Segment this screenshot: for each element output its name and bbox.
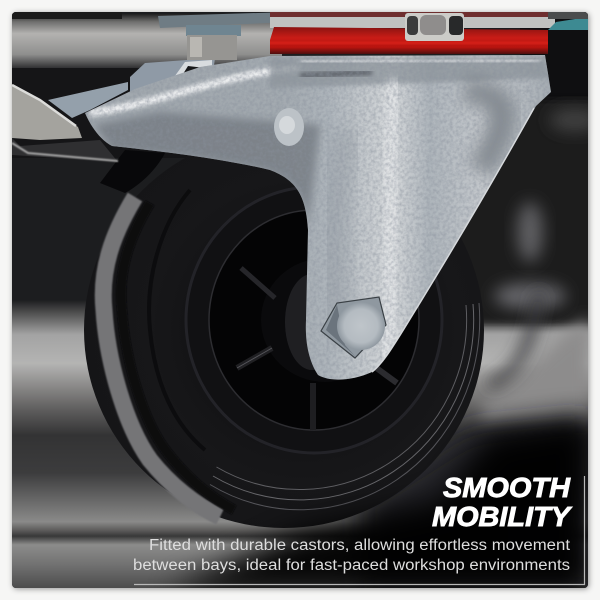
headline: MOBILITY xyxy=(432,501,572,532)
hub xyxy=(261,258,389,382)
rim spokes xyxy=(237,268,397,430)
corner frame line xyxy=(134,476,584,584)
lever plate xyxy=(12,85,82,140)
text scrim xyxy=(165,418,590,592)
top nut xyxy=(405,13,464,41)
red seal xyxy=(270,27,548,54)
headline xyxy=(432,472,572,532)
wheel rim xyxy=(186,187,442,453)
brake black clip xyxy=(100,150,165,193)
bracket body xyxy=(85,55,551,380)
tyre tread stripe xyxy=(103,197,220,517)
teal corner xyxy=(548,19,588,30)
description xyxy=(133,537,571,574)
description: between bays, ideal for fast-paced workshop environments xyxy=(133,557,570,574)
wheel xyxy=(84,188,484,528)
rivet xyxy=(274,108,304,146)
left plate xyxy=(158,12,270,28)
bracket shading and texture xyxy=(80,50,560,390)
lever lower bar xyxy=(12,138,118,162)
tyre xyxy=(84,260,484,528)
axle nut xyxy=(321,297,386,358)
headline: SMOOTH xyxy=(443,472,571,503)
lever arm xyxy=(48,82,128,118)
silver band xyxy=(270,17,555,28)
tyre grooves xyxy=(216,305,467,490)
bracket xyxy=(80,50,560,390)
bracket edge highlight xyxy=(372,108,534,372)
brake lever and pedal xyxy=(12,58,215,193)
left nut xyxy=(186,25,241,60)
description: Fitted with durable castors, allowing effortless movement xyxy=(149,537,571,554)
top mount xyxy=(158,12,588,60)
